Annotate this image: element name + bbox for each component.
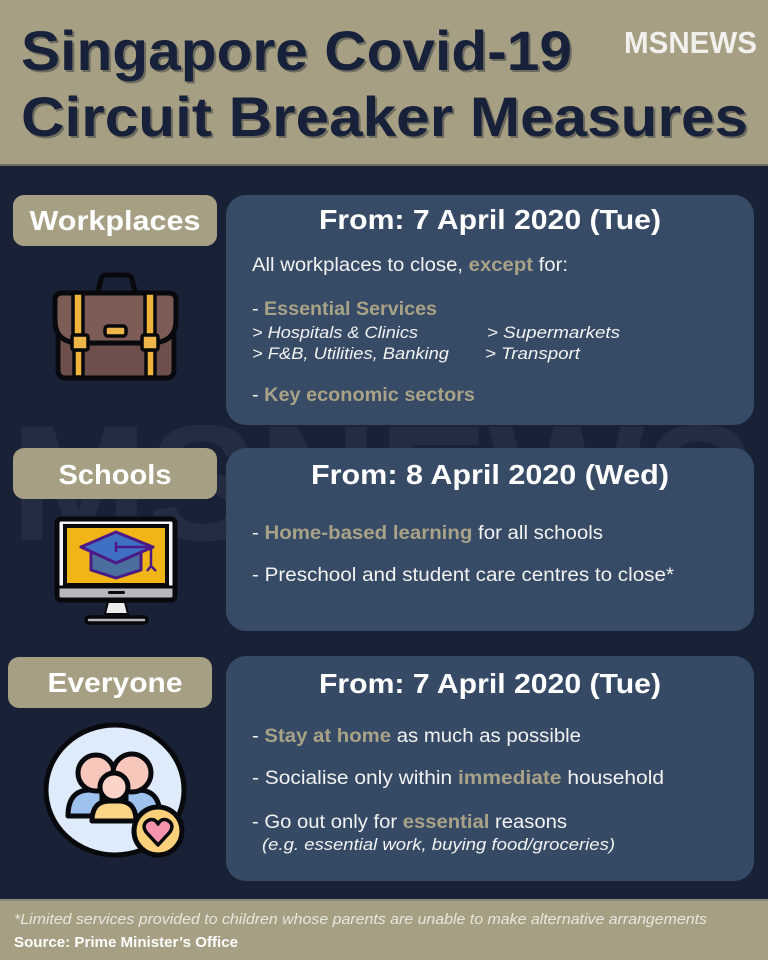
logo: MS News: MSNEWS [624,25,757,60]
footer band [0,899,768,960]
body text: - Home-based learning for all schools [252,523,603,544]
icon: family with heart [46,725,184,855]
title: Singapore Covid-19 [21,19,572,82]
watermark: MSNEWS [10,391,755,575]
panel: workplaces: > Hospitals & Clinics [252,323,419,342]
header band [0,0,768,166]
panel: workplaces: - Key economic sectors [252,385,475,406]
source: Source: Prime Minister’s Office [14,935,238,951]
icon: briefcase [55,275,176,378]
icon: computer with graduation cap [57,519,175,623]
panel: schools [226,448,754,631]
panel: schools: - Preschool and student care centres to close* [252,565,675,586]
section label: Workplaces: Workplaces [30,205,200,236]
title [21,19,750,150]
panel: workplaces: > Transport [485,344,581,363]
section label: Everyone: Everyone [48,667,182,698]
title: Singapore Covid-19 [23,21,574,84]
panel: everyone: - Go out only for essential reasons [252,812,567,833]
panel: everyone: - Socialise only within immediate household [252,768,664,789]
title: Circuit Breaker Measures [23,87,750,150]
date heading: From: 8 April 2020 (Wed) [311,459,669,490]
section label: Schools: Schools [58,459,172,490]
body text: - Stay at home as much as possible [252,726,581,747]
footnote: *Limited services provided to children whose parents are unable to make alternative arrangements [14,911,708,928]
date heading: From: 7 April 2020 (Tue) [319,204,661,235]
panel: workplaces [226,195,754,425]
section label: Workplaces [13,195,217,246]
date heading: From: 7 April 2020 (Tue) [319,668,661,699]
section label: Schools [13,448,217,499]
panel: workplaces: - Essential Services [252,299,437,320]
panel: workplaces: > F&B, Utilities, Banking [252,344,450,363]
panel: everyone: (e.g. essential work, buying food/groceries) [262,835,615,854]
body text: All workplaces to close, except for: [252,255,568,276]
panel: everyone [226,656,754,881]
panel: workplaces: > Supermarkets [487,323,621,342]
section label: Everyone [8,657,212,708]
title: Circuit Breaker Measures [21,85,748,148]
